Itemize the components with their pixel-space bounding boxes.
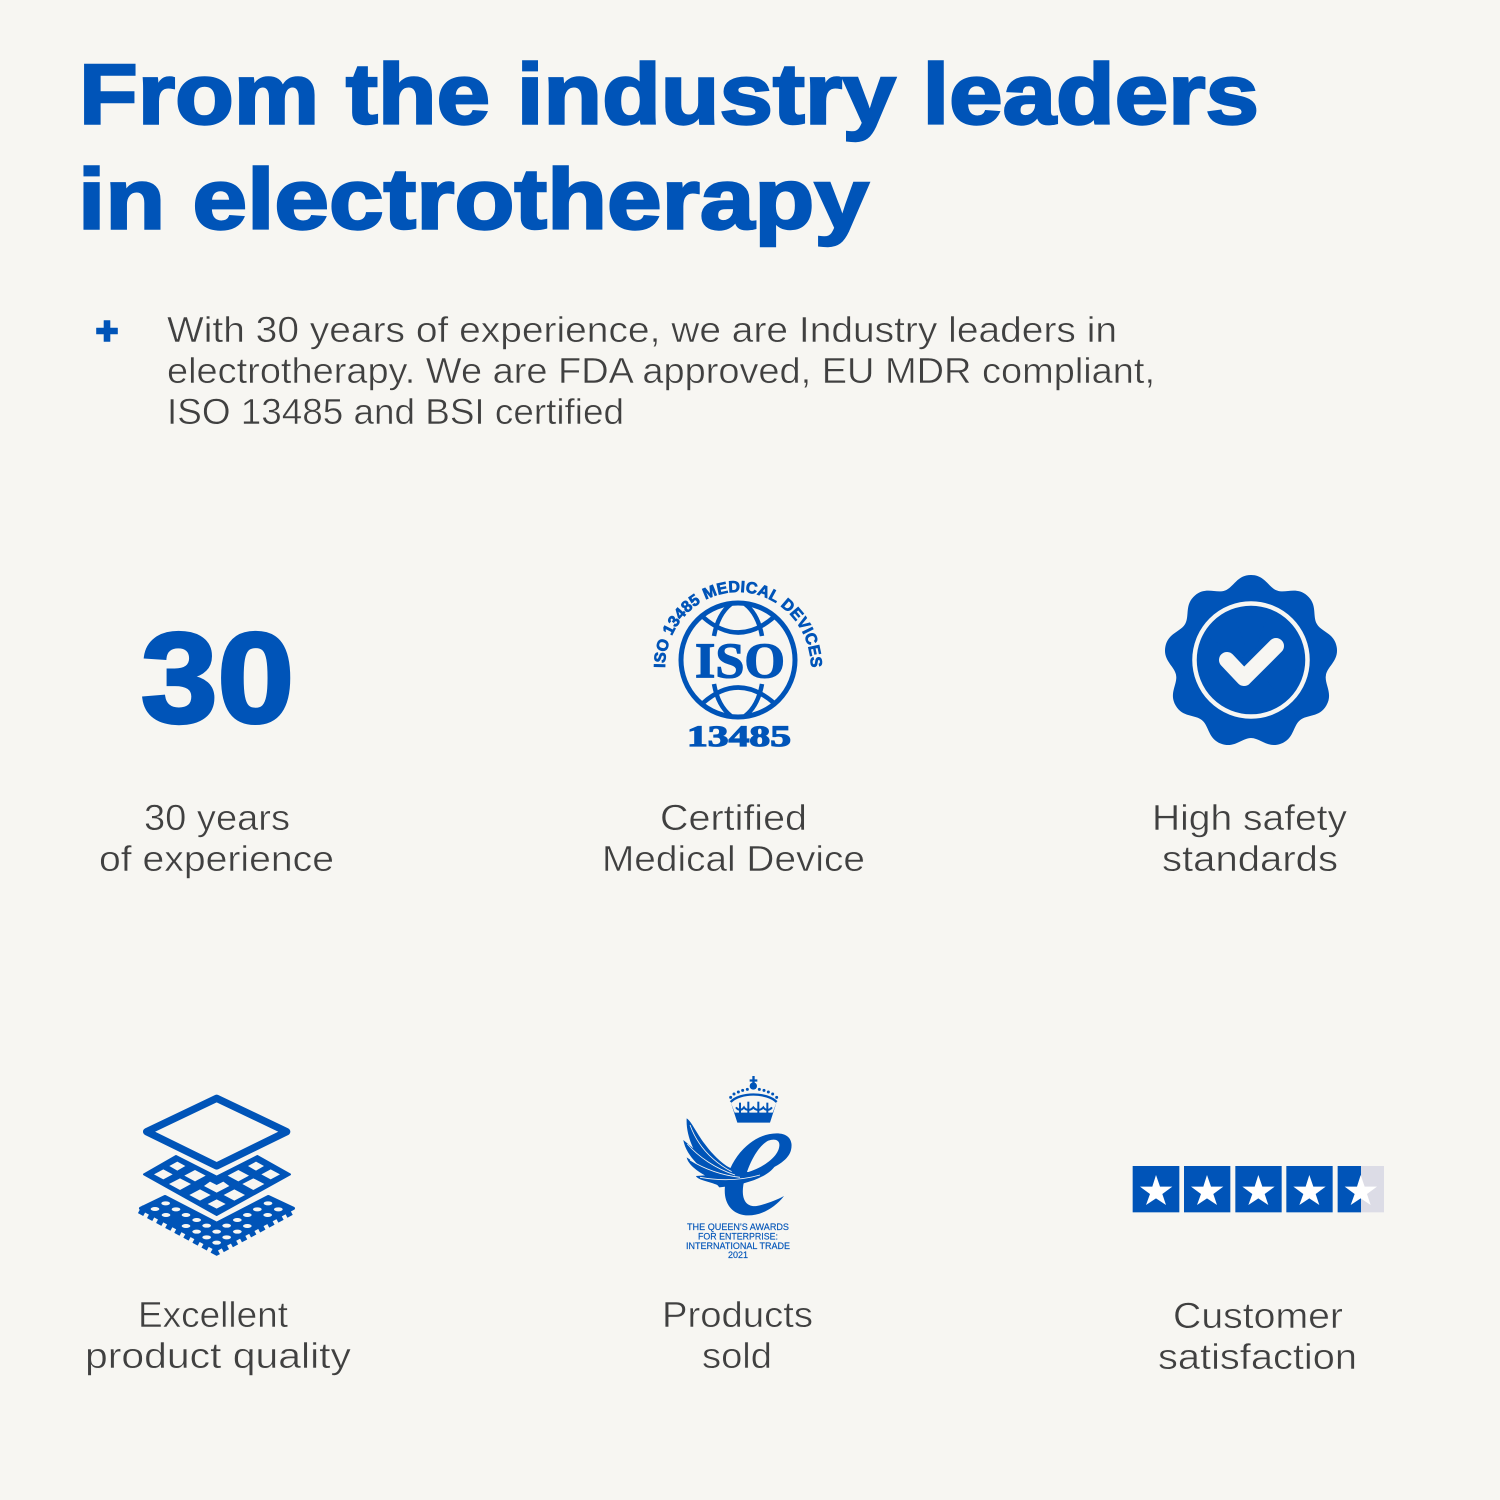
icon: star rating bbox=[1133, 1166, 1384, 1212]
title: in electrotherapy bbox=[78, 152, 869, 248]
intro text block: ISO 13485 and BSI certified bbox=[167, 391, 624, 432]
label: customer satisfaction: satisfaction bbox=[1158, 1336, 1357, 1377]
icon: number 30: 30 bbox=[141, 607, 294, 750]
title: From the industry leaders bbox=[79, 48, 1259, 142]
label: high safety standards: High safety bbox=[1152, 797, 1348, 838]
intro text block bbox=[167, 309, 1155, 432]
label: 30 years of experience: of experience bbox=[99, 838, 334, 879]
label: certified medical device: Medical Device bbox=[602, 838, 865, 879]
panel: 30 years of experience bbox=[99, 607, 334, 879]
label: products sold: sold bbox=[702, 1335, 772, 1376]
icon: ISO 13485 badge: 13485 bbox=[687, 720, 791, 753]
label: certified medical device: Certified bbox=[660, 797, 807, 838]
label: certified medical device bbox=[602, 797, 865, 879]
label: excellent product quality bbox=[85, 1294, 352, 1376]
panel: certified medical device bbox=[602, 580, 865, 879]
icon: plus bullet bbox=[96, 320, 118, 342]
panel: excellent product quality bbox=[85, 1098, 352, 1376]
intro text block: electrotherapy. We are FDA approved, EU MDR compliant, bbox=[167, 350, 1155, 391]
label: excellent product quality: Excellent bbox=[138, 1294, 288, 1335]
icon: ISO 13485 badge: ISO 13485 MEDICAL DEVICES bbox=[654, 580, 822, 668]
label: excellent product quality: product quality bbox=[85, 1335, 352, 1376]
label: products sold: Products bbox=[662, 1294, 813, 1335]
icon: Queen's Award emblem: INTERNATIONAL TRADE bbox=[686, 1241, 790, 1252]
panel: customer satisfaction bbox=[1133, 1166, 1384, 1377]
icon: Queen's Award emblem: FOR ENTERPRISE: bbox=[698, 1232, 778, 1242]
label: products sold bbox=[662, 1294, 813, 1376]
intro text block: With 30 years of experience, we are Industry leaders in bbox=[167, 309, 1117, 350]
panel: high safety standards bbox=[1152, 575, 1348, 879]
label: high safety standards bbox=[1152, 797, 1348, 879]
panel: products sold bbox=[662, 1076, 813, 1376]
icon: Queen's Award emblem bbox=[683, 1076, 792, 1261]
icon: layered mesh pads bbox=[140, 1098, 294, 1251]
label: high safety standards: standards bbox=[1162, 838, 1338, 879]
label: 30 years of experience: 30 years bbox=[144, 797, 290, 838]
icon: safety seal with check bbox=[1161, 575, 1341, 753]
label: customer satisfaction bbox=[1158, 1295, 1357, 1377]
icon: ISO 13485 badge bbox=[654, 580, 822, 753]
icon: ISO 13485 badge: ISO bbox=[695, 632, 785, 688]
title bbox=[78, 48, 1259, 248]
icon: Queen's Award emblem: 2021 bbox=[728, 1250, 748, 1261]
icon: Queen's Award emblem: THE QUEEN'S AWARDS bbox=[687, 1222, 789, 1233]
label: customer satisfaction: Customer bbox=[1173, 1295, 1343, 1336]
label: 30 years of experience bbox=[99, 797, 334, 879]
